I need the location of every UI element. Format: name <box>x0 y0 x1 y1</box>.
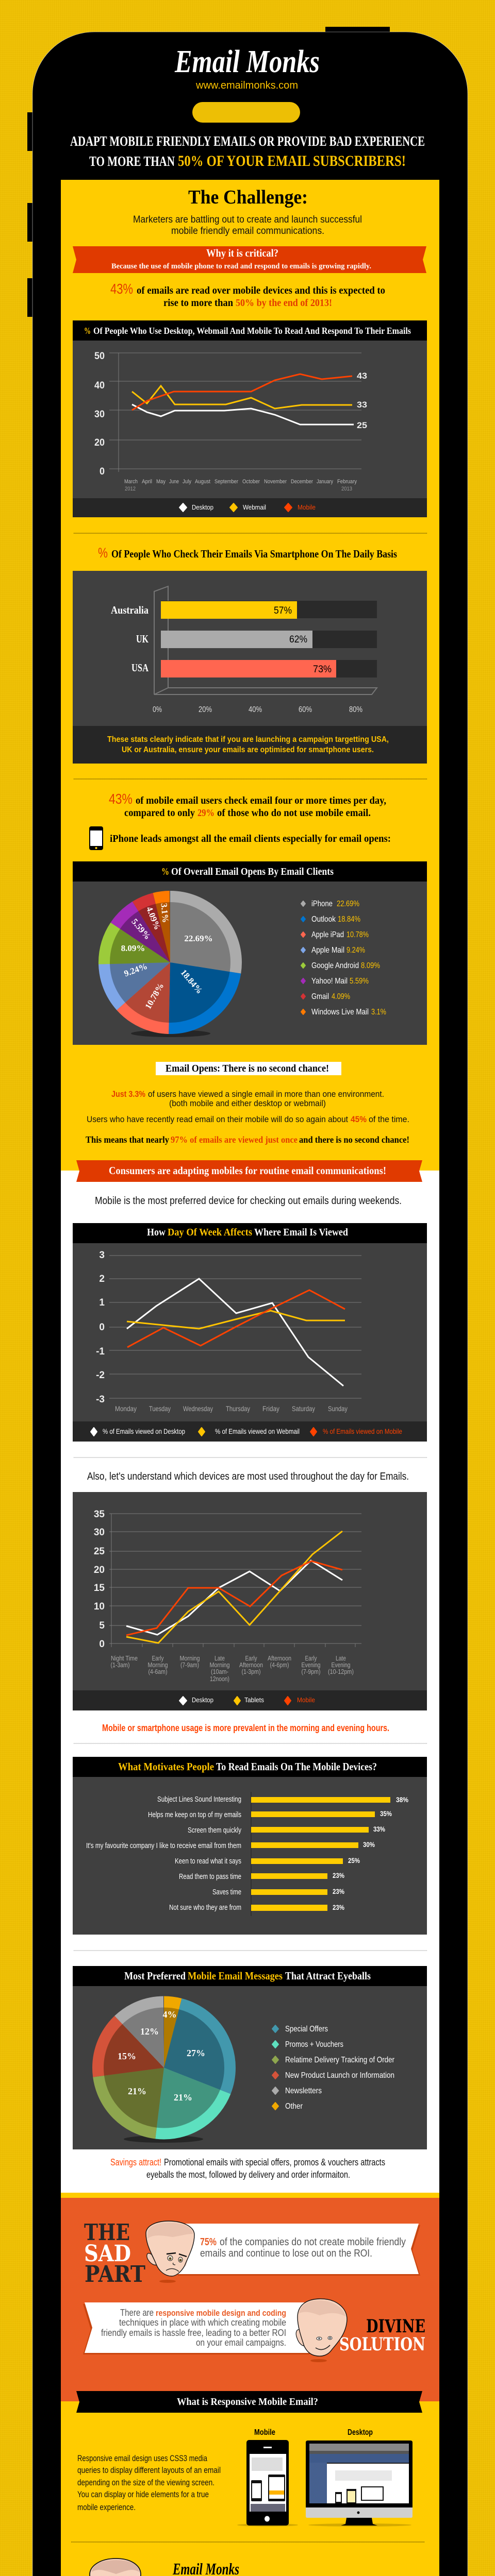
pie chart panel: email clients: Windows Live Mail <box>311 1008 369 1016</box>
line chart panel: desktop webmail mobile: 2012 <box>125 486 136 492</box>
pie chart panel: email clients: Outlook <box>311 915 336 924</box>
line chart panel: time of day: (1-3pm) <box>241 1668 261 1675</box>
text block: email opens facts: of users have viewed a single email in more than one environment. <box>148 1089 384 1099</box>
heading: smartphone daily check: Of People Who Check Their Emails Via Smartphone On The Daily Basis <box>111 548 397 560</box>
bar chart panel: motivations: 33% <box>373 1825 385 1833</box>
line chart panel: desktop webmail mobile: 25 <box>357 420 367 430</box>
responsive email explanation: mobile experience. <box>77 2502 136 2512</box>
pie chart panel: email clients: 8.09% <box>361 961 380 970</box>
screen yellow top panel <box>61 180 439 1171</box>
divine solution title: SOLUTION <box>339 2334 425 2355</box>
line chart panel: desktop webmail mobile: July <box>183 479 191 485</box>
line chart panel: desktop webmail mobile: November <box>264 479 287 485</box>
bar chart panel: countries: 20% <box>199 705 212 714</box>
bar chart panel: motivations: Screen them quickly <box>188 1826 241 1835</box>
responsive email explanation: depending on the size of the viewing screen. <box>77 2478 214 2487</box>
pie chart panel: preferred messages: 4% <box>163 2009 176 2020</box>
line chart panel: time of day: Late <box>336 1654 346 1662</box>
line chart panel: time of day: Morning <box>209 1661 230 1669</box>
ribbon: consumers adapting <box>76 1160 422 1182</box>
bar chart panel: countries: 0% <box>153 705 162 714</box>
savings attract text: Savings attract! <box>110 2157 161 2167</box>
responsive email explanation <box>77 2453 221 2512</box>
pie chart panel: preferred messages: New Product Launch or Information <box>285 2071 394 2080</box>
responsive email explanation: Responsive email design uses CSS3 media <box>77 2453 207 2463</box>
bar chart panel: motivations: Read them to pass time <box>179 1872 241 1881</box>
line chart panel: time of day: (1-3am) <box>110 1661 130 1669</box>
screen yellow bottom panel <box>61 2401 439 2576</box>
line chart panel: desktop webmail mobile: December <box>291 479 313 485</box>
text block: email opens facts <box>86 1089 409 1145</box>
line chart panel: time of day: (4-6pm) <box>270 1661 289 1669</box>
ribbon: divine solution text: There are <box>120 2308 154 2318</box>
line chart panel: time of day: Night Time <box>111 1654 138 1662</box>
challenge intro text: mobile friendly email communications. <box>171 226 324 236</box>
pie chart panel: email clients: iPhone <box>311 900 333 908</box>
line chart panel: desktop webmail mobile: % <box>84 326 91 336</box>
phone speaker <box>192 102 300 123</box>
pie chart panel: email clients: 9.24% <box>346 946 365 955</box>
bar chart panel: motivations: Not sure who they are from <box>169 1903 241 1912</box>
line chart panel: time of day: 30 <box>94 1527 105 1538</box>
stat: mobile users check four times: compared to only <box>124 807 195 819</box>
divine solution title: DIVINE <box>366 2316 425 2337</box>
bar chart panel: countries: UK or Australia, ensure your emails are optimised for smartphone users. <box>122 745 374 754</box>
line chart panel: time of day: Evening <box>301 1661 321 1669</box>
ribbon: what is responsive email: What is Responsive Mobile Email? <box>177 2396 318 2408</box>
line chart panel: time of day: (10am- <box>211 1668 228 1675</box>
headline: 50% OF YOUR EMAIL SUBSCRIBERS! <box>178 152 406 170</box>
line chart panel: day of week: Thursday <box>226 1404 250 1413</box>
text block: email opens facts: of the time. <box>369 1114 409 1124</box>
pie chart panel: email clients <box>73 861 427 1045</box>
pie chart panel: preferred messages <box>73 1966 427 2149</box>
responsive email explanation: queries to display different layouts of an email <box>77 2465 221 2475</box>
screen orange panel <box>61 2198 439 2401</box>
text block: email opens facts: Just 3.3% <box>111 1089 145 1099</box>
headline <box>70 133 425 170</box>
the sad part title <box>84 2219 145 2287</box>
line chart panel: time of day: Late <box>214 1654 225 1662</box>
bar chart panel: motivations: 23% <box>333 1903 344 1911</box>
pie chart panel: email clients: 8.09% <box>121 943 145 953</box>
savings attract text: eyeballs the most, followed by delivery and order informaiton. <box>146 2170 350 2180</box>
line chart panel: day of week <box>73 1223 427 1442</box>
line chart panel: desktop webmail mobile: October <box>242 479 260 485</box>
line chart panel: day of week: 1 <box>99 1297 105 1308</box>
devices through the day statement: Also, let's understand which devices are most used throughout the day for Emails. <box>87 1471 409 1482</box>
savings attract text <box>110 2157 385 2180</box>
pie chart panel: preferred messages: 21% <box>174 2092 192 2103</box>
line chart panel: day of week: Sunday <box>328 1404 348 1413</box>
line chart panel: time of day: Desktop <box>192 1696 213 1704</box>
stat: mobile users check four times: 43% <box>109 791 133 807</box>
icon: sad monk head <box>146 2221 194 2283</box>
pie chart panel: email clients: 9.24% <box>123 961 148 978</box>
bar chart panel: motivations: 23% <box>333 1871 344 1879</box>
line chart panel: desktop webmail mobile: 33 <box>357 400 367 410</box>
mobile device mockup <box>237 2428 298 2527</box>
ribbon: why it is critical: Why it is critical? <box>206 247 278 259</box>
line chart panel: desktop webmail mobile: Of People Who Use Desktop, Webmail And Mobile To Read And Respond To Their Emails <box>93 326 411 336</box>
line chart panel: desktop webmail mobile: 40 <box>94 380 105 391</box>
mobile device mockup: Mobile <box>254 2428 275 2437</box>
ribbon: sad part text: of the companies do not create mobile friendly <box>220 2236 406 2248</box>
line chart panel: desktop webmail mobile: June <box>169 479 179 485</box>
bar chart panel: motivations: Helps me keep on top of my emails <box>148 1810 241 1819</box>
line chart panel: time of day: 35 <box>94 1509 105 1520</box>
pie chart panel: preferred messages: Most Preferred <box>124 1970 186 1982</box>
bar chart panel: countries: These stats clearly indicate that if you are launching a campaign targetting USA, <box>107 735 389 744</box>
line chart panel: time of day: Early <box>152 1654 164 1662</box>
bar chart panel: motivations <box>73 1757 427 1935</box>
bar chart panel: countries <box>73 571 427 764</box>
line chart panel: day of week: 2 <box>99 1274 105 1284</box>
line chart panel: time of day <box>73 1492 427 1710</box>
pie chart panel: email clients: 10.78% <box>143 981 166 1011</box>
line chart panel: desktop webmail mobile: February <box>337 479 357 485</box>
line chart panel: time of day: 20 <box>94 1565 105 1575</box>
bar chart panel: motivations: Keen to read what it says <box>175 1857 241 1866</box>
line chart panel: desktop webmail mobile: March <box>124 479 138 485</box>
line chart panel: time of day: 25 <box>94 1546 105 1557</box>
challenge intro text <box>133 214 362 236</box>
ribbon: divine solution text: responsive mobile design and coding <box>156 2308 286 2318</box>
pie chart panel: email clients: 18.84% <box>179 968 205 996</box>
text block: email opens facts: This means that nearly <box>86 1134 169 1145</box>
pie chart panel: email clients: 5.59% <box>129 917 153 941</box>
line chart panel: desktop webmail mobile: Mobile <box>298 503 316 511</box>
bar chart panel: motivations: Subject Lines Sound Interesting <box>157 1795 241 1804</box>
line chart panel: day of week: Saturday <box>292 1404 315 1413</box>
heading: smartphone daily check <box>98 545 397 561</box>
pie chart panel: email clients: Apple Mail <box>311 946 344 955</box>
website url: www.emailmonks.com <box>195 80 298 91</box>
line chart panel: time of day: Early <box>245 1654 257 1662</box>
desktop monitor mockup: Desktop <box>348 2428 373 2437</box>
line chart panel: desktop webmail mobile: April <box>142 479 152 485</box>
line chart panel: desktop webmail mobile: May <box>156 479 166 485</box>
desktop monitor mockup <box>306 2428 412 2527</box>
pie chart panel: email clients: Yahoo! Mail <box>311 977 348 986</box>
line chart panel: day of week: -1 <box>96 1346 105 1357</box>
pie chart panel: email clients: Gmail <box>311 992 329 1001</box>
bar chart panel: countries: USA <box>131 662 149 674</box>
line chart panel: day of week: % of Emails viewed on Desktop <box>103 1427 185 1435</box>
pie chart panel: email clients: 22.69% <box>184 934 213 943</box>
pie chart panel: email clients: 3.1% <box>159 903 171 923</box>
bar chart panel: countries: Australia <box>111 604 148 616</box>
pie chart panel: preferred messages: Relatime Delivery Tracking of Order <box>285 2056 395 2064</box>
line chart panel: time of day: 15 <box>94 1583 105 1594</box>
pie chart panel: preferred messages: Promos + Vouchers <box>285 2040 343 2049</box>
text block: email opens facts: (both mobile and either desktop or webmail) <box>169 1098 326 1108</box>
pie chart panel: preferred messages: That Attract Eyeballs <box>285 1970 371 1982</box>
line chart panel: desktop webmail mobile: Webmail <box>243 503 266 511</box>
line chart panel: desktop webmail mobile: 30 <box>94 409 105 420</box>
pie chart panel: email clients: 4.09% <box>144 905 162 931</box>
pie chart panel: preferred messages: 27% <box>187 2048 205 2058</box>
heading: smartphone daily check: % <box>98 545 108 561</box>
line chart panel: day of week: Friday <box>262 1404 279 1413</box>
line chart panel: day of week: Monday <box>115 1404 137 1413</box>
the sad part title: SAD <box>84 2241 131 2267</box>
line chart panel: day of week: Wednesday <box>183 1404 213 1413</box>
text block: email opens facts: 97% of emails are viewed just once <box>171 1134 298 1145</box>
text block: email opens facts: 45% <box>351 1114 367 1124</box>
pie chart panel: email clients: 22.69% <box>337 900 359 908</box>
pie chart panel: preferred messages: 12% <box>140 2026 159 2037</box>
responsive email explanation: You can display or hide elements for a true <box>77 2489 209 2499</box>
line chart panel: time of day: 10 <box>94 1601 105 1612</box>
ribbon: consumers adapting: Consumers are adapting mobiles for routine email communications! <box>109 1164 386 1177</box>
savings attract text: Promotional emails with special offers, promos & vouchers attracts <box>164 2157 385 2167</box>
line chart panel: time of day: Mobile <box>297 1696 315 1704</box>
line chart panel: desktop webmail mobile: September <box>214 479 238 485</box>
line chart panel: desktop webmail mobile: 43 <box>357 371 367 381</box>
stat: mobile users check four times: of mobile email users check email four or more times per day, <box>136 795 386 806</box>
stat: 43 percent of emails: 43% <box>110 281 133 297</box>
ribbon: divine solution text: on your email campaigns. <box>196 2337 286 2348</box>
ribbon: divine solution text: friendly emails is hassle free, leading to a better ROI <box>101 2328 286 2338</box>
bar chart panel: countries: 73% <box>313 664 332 675</box>
challenge intro text: Marketers are battling out to create and launch successful <box>133 214 362 225</box>
logo: Email Monks <box>174 44 320 79</box>
bar chart panel: motivations: It's my favourite company I like to receive email from them <box>86 1841 241 1850</box>
text block: email opens facts: and there is no second chance! <box>299 1134 409 1145</box>
bar chart panel: countries: 40% <box>249 705 262 714</box>
iphone leads statement: iPhone leads amongst all the email clients especially for email opens: <box>110 833 391 844</box>
stat: 43 percent of emails <box>110 281 385 309</box>
pie chart panel: email clients: 18.84% <box>338 915 360 924</box>
text block: email opens facts: Users who have recently read email on their mobile will do so again about <box>87 1114 348 1124</box>
stat: mobile users check four times: of those who do not use mobile email. <box>217 807 371 819</box>
line chart panel: time of day: Morning <box>147 1661 168 1669</box>
pie chart panel: preferred messages: Special Offers <box>285 2025 328 2033</box>
bar chart panel: countries: 57% <box>274 605 292 616</box>
line chart panel: day of week: 3 <box>99 1250 105 1261</box>
mobile weekend statement: Mobile is the most preferred device for checking out emails during weekends. <box>95 1195 402 1207</box>
screen yellow strip <box>61 2193 439 2198</box>
line chart panel: day of week: % of Emails viewed on Mobile <box>323 1427 402 1435</box>
bar chart panel: motivations: 38% <box>396 1795 408 1804</box>
line chart panel: time of day: Morning <box>179 1654 200 1662</box>
line chart panel: desktop webmail mobile: 20 <box>94 437 105 448</box>
ribbon: sad part text <box>178 2224 420 2276</box>
pie chart panel: preferred messages: Other <box>285 2102 303 2111</box>
line chart panel: day of week: Tuesday <box>149 1404 171 1413</box>
bar chart panel: countries: 80% <box>349 705 362 714</box>
the sad part title: THE <box>84 2219 130 2246</box>
line chart panel: time of day: (7-9pm) <box>301 1668 321 1675</box>
stat: 43 percent of emails: of emails are read over mobile devices and this is expected to <box>137 285 385 296</box>
line chart panel: time of day: Afternoon <box>239 1661 263 1669</box>
icon: sitting monk <box>80 2558 154 2576</box>
challenge heading: The Challenge: <box>188 187 308 208</box>
line chart panel: desktop webmail mobile: January <box>317 479 333 485</box>
pie chart panel: email clients: % <box>161 866 169 877</box>
screen white panel <box>61 1171 439 2193</box>
line chart panel: time of day: (4-6am) <box>148 1668 167 1675</box>
bar chart panel: countries: 60% <box>299 705 312 714</box>
stat: mobile users check four times: 29% <box>197 807 214 819</box>
line chart panel: desktop webmail mobile: August <box>195 479 210 485</box>
ribbon: sad part text: 75% <box>200 2236 217 2248</box>
line chart panel: desktop webmail mobile <box>73 320 427 517</box>
pie chart panel: preferred messages: Newsletters <box>285 2087 322 2095</box>
pie chart panel: email clients: 10.78% <box>346 930 369 939</box>
line chart panel: day of week: How <box>147 1227 166 1238</box>
pie chart panel: preferred messages: 15% <box>118 2051 136 2061</box>
line chart panel: time of day: (7-9am) <box>180 1661 199 1669</box>
bar chart panel: motivations: 25% <box>348 1856 360 1865</box>
line chart panel: desktop webmail mobile: 0 <box>100 466 105 477</box>
ribbon: divine solution text: techniques in place with which creating mobile <box>119 2317 286 2328</box>
line chart panel: desktop webmail mobile: Desktop <box>192 503 213 511</box>
stat: 43 percent of emails: rise to more than <box>163 297 233 309</box>
divine solution title <box>339 2316 425 2355</box>
line chart panel: day of week: % of Emails viewed on Webmail <box>215 1427 300 1435</box>
line chart panel: desktop webmail mobile: 50 <box>94 351 105 362</box>
line chart panel: day of week: -3 <box>96 1394 105 1405</box>
ribbon: why it is critical: Because the use of mobile phone to read and respond to emails is growing rapidly. <box>111 262 371 270</box>
bar chart panel: motivations: Saves time <box>212 1888 241 1896</box>
icon: happy monk head <box>296 2299 347 2362</box>
line chart panel: time of day: Afternoon <box>268 1654 291 1662</box>
pie chart panel: email clients: Google Android <box>311 961 359 970</box>
the sad part title: PART <box>85 2261 145 2287</box>
pie chart panel: email clients: Apple iPad <box>311 930 344 939</box>
line chart panel: time of day: Early <box>305 1654 317 1662</box>
line chart panel: day of week: -2 <box>96 1370 105 1381</box>
pie chart panel: preferred messages: 21% <box>128 2086 146 2096</box>
ribbon: what is responsive email <box>76 2391 422 2413</box>
headline: TO MORE THAN <box>89 154 175 169</box>
stat: 43 percent of emails: 50% by the end of 2013! <box>236 297 332 309</box>
pie chart panel: email clients: 5.59% <box>350 977 369 986</box>
bar chart panel: countries: 62% <box>289 634 307 645</box>
bar chart panel: countries: UK <box>136 633 149 645</box>
line chart panel: time of day: (10-12pm) <box>328 1668 354 1675</box>
stat: mobile users check four times <box>109 791 386 819</box>
pie chart panel: email clients: 4.09% <box>332 992 350 1001</box>
bar chart panel: motivations: 30% <box>363 1840 375 1849</box>
bar chart panel: motivations: To Read Emails On The Mobile Devices? <box>216 1760 377 1773</box>
pie chart panel: preferred messages: Mobile Email Messages <box>188 1970 283 1982</box>
bar chart panel: motivations: 35% <box>380 1809 392 1818</box>
bar chart panel: motivations: 23% <box>333 1887 344 1895</box>
bar chart panel: motivations: What Motivates People <box>118 1760 214 1773</box>
pie chart panel: email clients: Of Overall Email Opens By Email Clients <box>171 866 334 877</box>
mobile usage callout: Mobile or smartphone usage is more prevalent in the morning and evening hours. <box>102 1723 389 1733</box>
line chart panel: time of day: 0 <box>99 1639 105 1650</box>
ribbon: why it is critical <box>73 246 426 273</box>
ribbon: sad part text: emails and continue to lose out on the ROI. <box>200 2248 372 2259</box>
line chart panel: day of week: 0 <box>99 1322 105 1333</box>
line chart panel: time of day: 12noon) <box>210 1675 229 1683</box>
callout: no second chance: Email Opens: There is no second chance! <box>166 1063 329 1074</box>
icon: iphone <box>89 826 103 850</box>
line chart panel: day of week: Where Email Is Viewed <box>254 1227 348 1238</box>
line chart panel: time of day: Tablets <box>244 1696 264 1704</box>
line chart panel: time of day: Evening <box>331 1661 351 1669</box>
line chart panel: desktop webmail mobile: 2013 <box>341 486 352 492</box>
pie chart panel: email clients: 3.1% <box>371 1008 386 1016</box>
line chart panel: time of day: 5 <box>99 1620 105 1631</box>
ribbon: divine solution text <box>83 2302 309 2354</box>
line chart panel: day of week: Day Of Week Affects <box>168 1227 252 1238</box>
